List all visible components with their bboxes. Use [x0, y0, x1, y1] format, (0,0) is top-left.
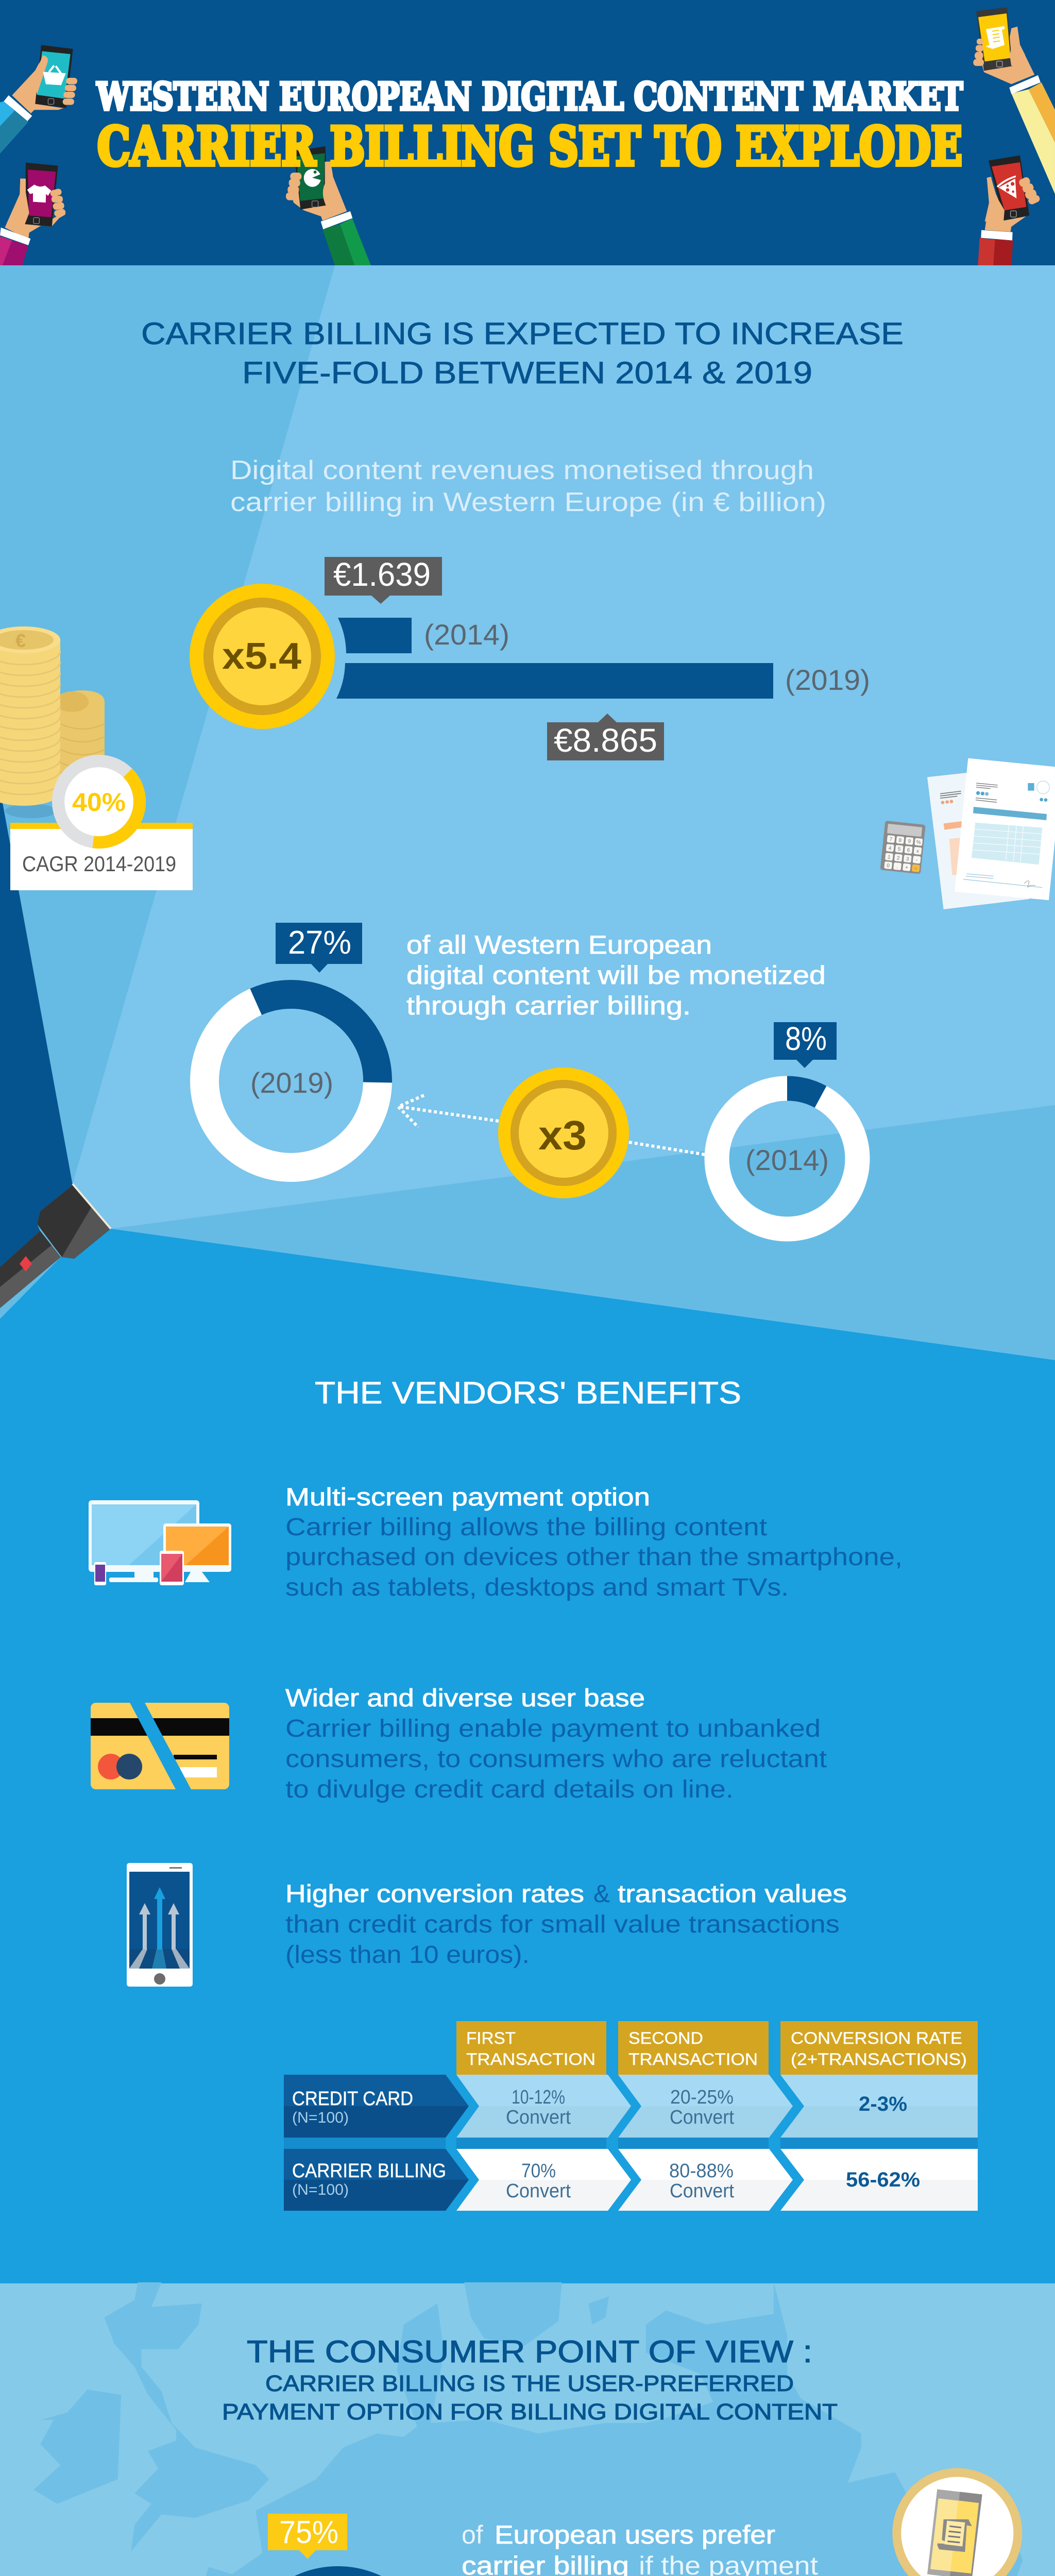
icon: calculator: =	[914, 866, 917, 872]
icon: coin stacks: €	[15, 630, 26, 651]
callout: 2014 value	[325, 556, 442, 604]
table row: carrier billing: 56-62%	[846, 2168, 920, 2191]
text: user base benefit: Wider and diverse user base	[285, 1685, 645, 1712]
icon: calculator: x	[916, 849, 919, 854]
text: European users prefer: European users prefer	[495, 2520, 775, 2549]
text: share of digital content: digital content will be monetized	[406, 961, 826, 990]
callout: 2019 value	[547, 714, 664, 760]
illustration: hand holding phone with pizza	[978, 156, 1041, 265]
icon: calculator	[880, 821, 926, 874]
table row: carrier billing	[284, 2149, 978, 2211]
callout: 75%: 75%	[279, 2515, 338, 2550]
text: conversion rates benefit: than credit cards for small value transactions	[285, 1911, 840, 1938]
heading: vendors benefits: THE VENDORS' BENEFITS	[315, 1376, 741, 1410]
table header: FIRST	[466, 2029, 516, 2047]
text: multi-screen benefit	[285, 1484, 903, 1601]
icon: calculator: 9	[908, 839, 911, 844]
icon: calculator: +	[905, 865, 909, 871]
callout: 27%	[276, 923, 362, 973]
heading: consumer point of view	[222, 2334, 838, 2425]
table header: TRANSACTION	[628, 2050, 758, 2069]
bar: 2014	[338, 618, 412, 653]
text: share of digital content: of all Western European	[406, 930, 712, 959]
table row: credit card	[284, 2075, 978, 2138]
icon: coin stacks	[0, 626, 105, 818]
text: European users prefer	[462, 2520, 818, 2576]
heading: consumer point of view: CARRIER BILLING IS THE USER-PREFERRED	[265, 2371, 794, 2396]
illustration: hand holding phone with basket	[0, 45, 77, 154]
text: conversion rates benefit: Higher conversion rates	[285, 1880, 584, 1908]
icon: calculator: 8	[898, 838, 902, 843]
text: multi-screen benefit: Carrier billing allows the billing content	[285, 1514, 767, 1541]
icon: calculator: .	[896, 864, 898, 870]
table row: credit card: Convert	[670, 2107, 734, 2128]
icon: calculator: 0	[887, 863, 890, 869]
text: user base benefit: to divulge credit card details on line.	[285, 1776, 734, 1803]
text: conversion rates benefit: transaction values	[618, 1880, 847, 1908]
table header: CONVERSION RATE	[791, 2029, 962, 2047]
text: European users prefer: of	[462, 2520, 483, 2549]
panel: vendors benefits background	[0, 1229, 1055, 2283]
icon: calculator: 4	[888, 845, 892, 852]
text: user base benefit	[285, 1685, 827, 1803]
icon: calculator: %	[916, 839, 921, 845]
table header	[456, 2021, 978, 2075]
bar chart: revenues 2014 vs 2019	[190, 556, 870, 760]
text: revenues description: carrier billing in Western Europe (in € billion)	[230, 487, 826, 517]
icon: flashlight	[0, 1184, 111, 1308]
arrow: dotted growth arrow	[398, 1095, 705, 1155]
text: revenues description: Digital content revenues monetised through	[230, 455, 814, 485]
heading: consumer point of view: PAYMENT OPTION FOR BILLING DIGITAL CONTENT	[222, 2399, 838, 2425]
table row: credit card: (N=100)	[292, 2109, 349, 2126]
heading: carrier billing five-fold	[141, 316, 904, 390]
label: 2014: (2014)	[424, 618, 509, 651]
table header: SECOND	[628, 2029, 703, 2047]
text: multi-screen benefit: purchased on devices other than the smartphone,	[285, 1544, 903, 1571]
callout: 8%	[774, 1020, 837, 1068]
table row: credit card: 10-12%	[512, 2087, 565, 2108]
icon: credit card	[91, 1702, 229, 1790]
icon: calculator: -	[915, 857, 918, 863]
icon: x5.4 coin	[190, 584, 335, 729]
text: conversion rates benefit: (less than 10 euros).	[285, 1941, 530, 1969]
callout: 8%: 8%	[785, 1020, 827, 1057]
donut chart: 2019 share	[205, 994, 378, 1167]
table header: TRANSACTION	[466, 2050, 595, 2069]
text: conversion rates benefit	[285, 1880, 847, 1969]
text: share of digital content: through carrier billing.	[406, 991, 691, 1020]
donut chart: 2019 share: (2019)	[250, 1066, 333, 1099]
text: multi-screen benefit: Multi-screen payment option	[285, 1484, 650, 1511]
icon: calculator: 6	[907, 848, 910, 853]
illustration: hand holding phone with pacman	[286, 146, 371, 265]
donut chart: 2014 share: (2014)	[745, 1144, 829, 1176]
callout: 27%: 27%	[288, 924, 351, 961]
illustration: hand holding phone with receipt	[973, 7, 1055, 194]
callout: 2019 value: €8.865	[554, 722, 657, 759]
callout: 2014 value: €1.639	[333, 556, 431, 593]
bar: 2019	[336, 663, 773, 699]
icon: x5.4 coin: x5.4	[222, 636, 301, 677]
table: conversion comparison	[284, 2021, 978, 2211]
table row: carrier billing: 70%	[521, 2160, 556, 2182]
icon: magnifier over phone	[892, 2468, 1055, 2576]
panel: market growth background	[0, 265, 1055, 1363]
table row: carrier billing: 80-88%	[669, 2160, 734, 2182]
callout: CAGR 40%	[10, 761, 193, 890]
callout: CAGR 40%: 40%	[72, 788, 126, 817]
heading: carrier billing five-fold: FIVE-FOLD BETWEEN 2014 & 2019	[242, 355, 812, 390]
icon: x3 coin	[498, 1067, 629, 1198]
label: 2019: (2019)	[785, 664, 870, 696]
table row: carrier billing: Convert	[506, 2180, 571, 2202]
table row: credit card: 2-3%	[859, 2093, 907, 2115]
table row: carrier billing: Convert	[670, 2180, 734, 2202]
icon: calculator: 7	[889, 837, 893, 842]
heading: carrier billing five-fold: CARRIER BILLING IS EXPECTED TO INCREASE	[141, 316, 904, 351]
panel: header	[0, 0, 1055, 265]
illustration: invoices and calculator	[880, 758, 1055, 909]
text: user base benefit: consumers, to consumers who are reluctant	[285, 1745, 827, 1773]
table row: carrier billing: CARRIER BILLING	[292, 2160, 446, 2182]
icon: calculator: 3	[906, 856, 909, 862]
table row: credit card: CREDIT CARD	[292, 2088, 413, 2110]
text: revenues description	[230, 455, 826, 517]
text: user base benefit: Carrier billing enable payment to unbanked	[285, 1715, 821, 1742]
text: share of digital content	[406, 930, 826, 1020]
illustration: hand holding phone with t-shirt	[0, 163, 66, 265]
icon: calculator: 5	[897, 846, 901, 853]
table row: credit card: Convert	[506, 2107, 571, 2128]
callout: CAGR 40%: CAGR 2014-2019	[22, 852, 176, 876]
callout: 75%	[268, 2514, 347, 2559]
icon: x3 coin: x3	[538, 1112, 587, 1158]
icon: calculator: 1	[887, 854, 891, 860]
table header: (2+TRANSACTIONS)	[791, 2050, 967, 2069]
table row: credit card: 20-25%	[670, 2087, 734, 2108]
table row: carrier billing: (N=100)	[292, 2181, 349, 2198]
text: multi-screen benefit: such as tablets, desktops and smart TVs.	[285, 1574, 789, 1601]
donut chart: 2014 share	[717, 1088, 857, 1229]
text: conversion rates benefit: &	[593, 1880, 610, 1908]
panel: consumer point of view background with Europe map	[0, 2282, 1055, 2576]
heading: consumer point of view: THE CONSUMER POINT OF VIEW :	[247, 2334, 812, 2369]
icon: phone with rising arrows	[127, 1863, 193, 1987]
icon: calculator: 2	[896, 855, 900, 861]
title	[96, 75, 963, 178]
icon: multi-screen devices	[89, 1500, 231, 1585]
